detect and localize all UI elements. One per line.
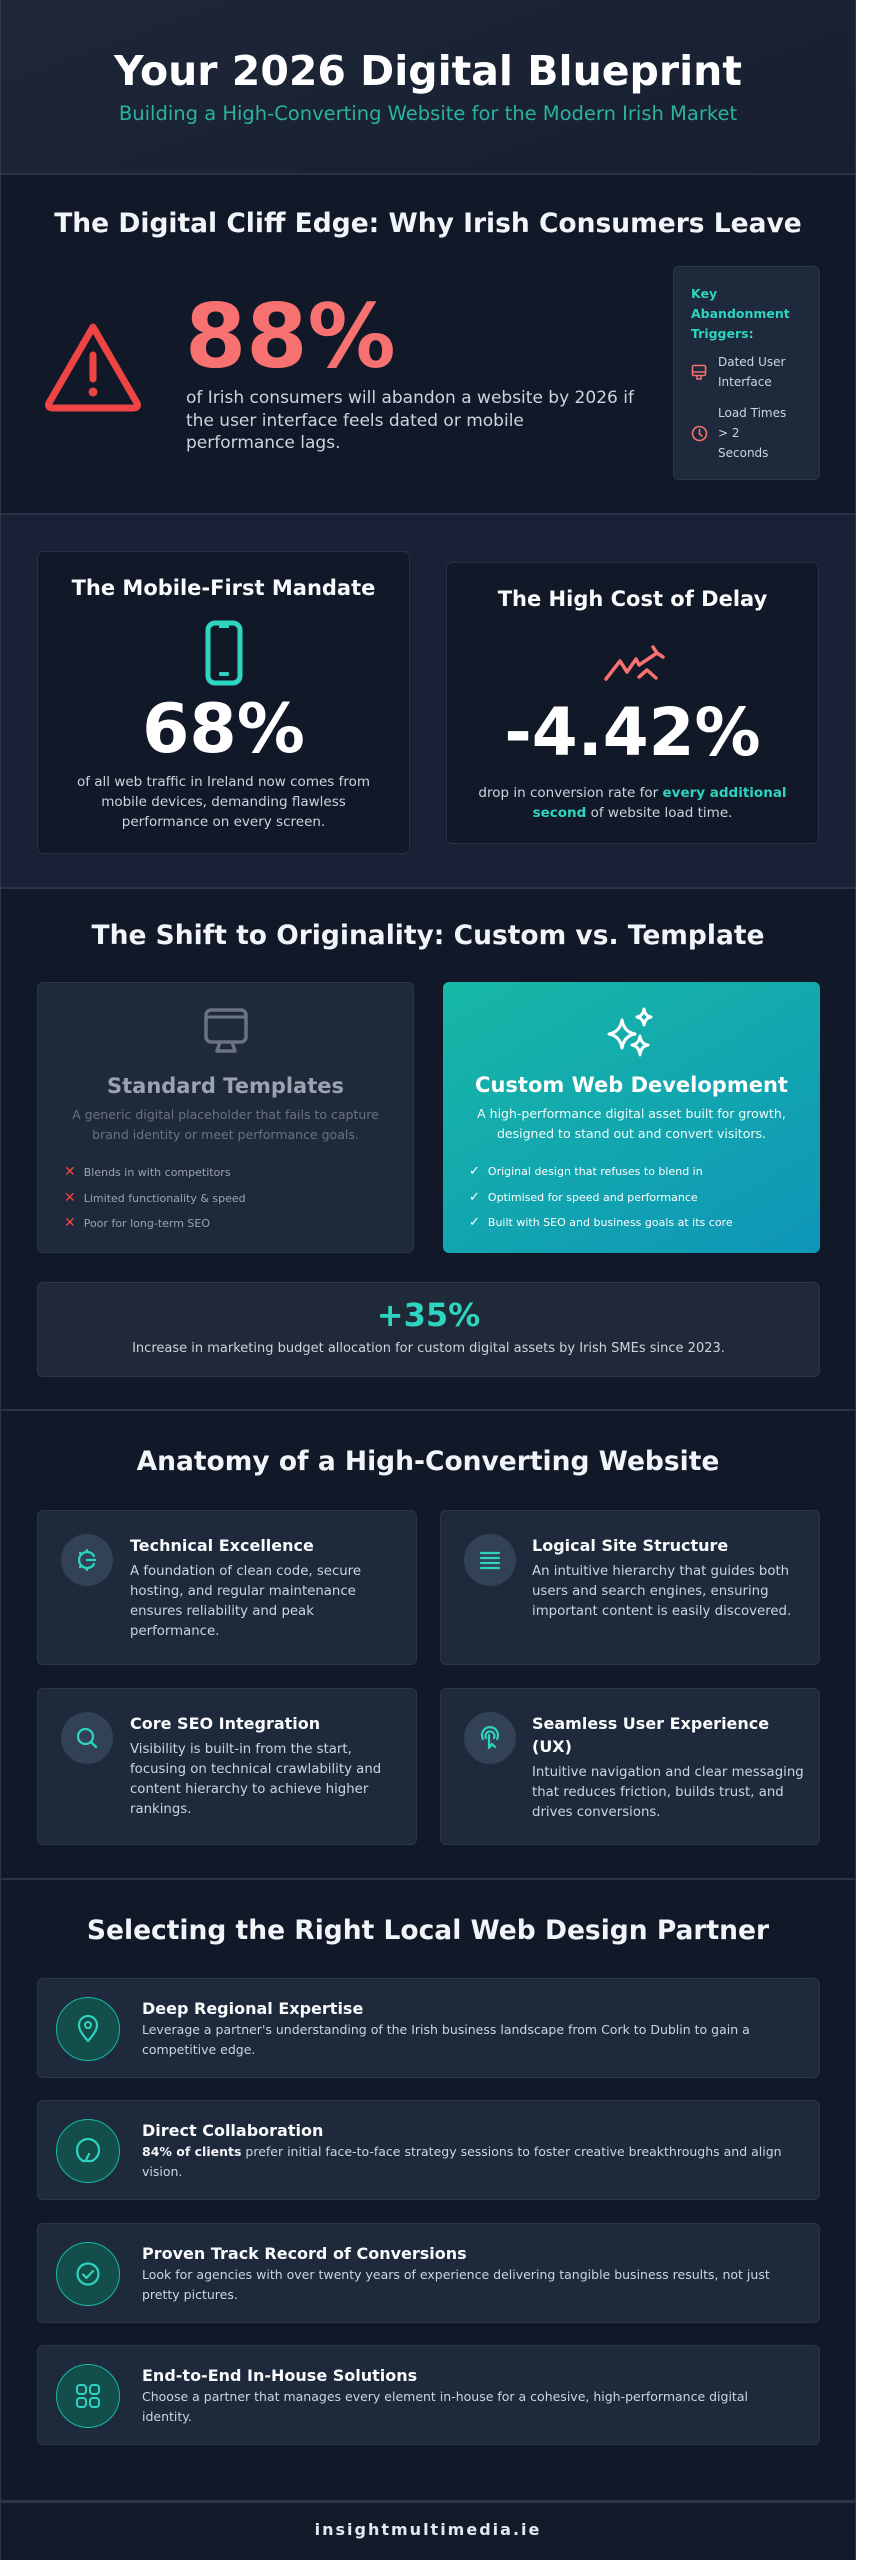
text: Leverage a partner's understanding of the Irish business landscape from Cork to Dublin to gain a competitive edge. [142, 2022, 750, 2057]
title: Deep Regional Expertise [142, 1999, 363, 2018]
panel: digital cliff edge [1, 173, 855, 513]
description: A high-performance digital asset built for growth, designed to stand out and convert visitors. [477, 1106, 786, 1141]
text: Look for agencies with over twenty years of experience delivering tangible business results, not just pretty pictures. [142, 2267, 770, 2302]
card: track record [37, 2223, 820, 2323]
title: Core SEO Integration [130, 1714, 320, 1733]
list: benefits: ✓ Original design that refuses to blend in [469, 1164, 703, 1179]
trigger: dated UI: Interface [718, 375, 772, 389]
heading: The Digital Cliff Edge: Why Irish Consumers Leave [54, 208, 802, 239]
description: the user interface feels dated or mobile [186, 410, 524, 430]
list: benefits: ✓ Built with SEO and business goals at its core [469, 1215, 733, 1230]
triggers heading: Key [691, 286, 717, 301]
triggers heading: Triggers: [691, 326, 754, 341]
stat 68%: 68% [142, 690, 305, 769]
title: Seamless User Experience (UX) [532, 1714, 769, 1756]
title: Technical Excellence [130, 1536, 314, 1555]
title: End-to-End In-House Solutions [142, 2366, 417, 2385]
text: A foundation of clean code, secure hosting, and regular maintenance ensures reliability and peak performance. [130, 1564, 361, 1639]
heading: The Shift to Originality: Custom vs. Template [92, 920, 764, 951]
icon: chat [56, 2119, 120, 2183]
trigger: load times: > 2 [718, 426, 740, 440]
card: custom web development [443, 982, 820, 1253]
text: 84% of clients prefer initial face-to-face strategy sessions to foster creative breakthroughs and align vision. [142, 2144, 782, 2179]
icon: pointer [464, 1712, 516, 1764]
list: drawbacks: ✕ Limited functionality & speed [64, 1190, 246, 1206]
card: core SEO [37, 1688, 417, 1845]
icon: search [61, 1712, 113, 1764]
title: Logical Site Structure [532, 1536, 728, 1555]
footer [1, 2500, 855, 2560]
panel: mobile and delay stats [1, 513, 855, 887]
trigger: dated UI [692, 355, 786, 389]
trigger: load times: Load Times [718, 406, 786, 420]
text: Visibility is built-in from the start, focusing on technical crawlability and content hierarchy to achieve higher rankings. [130, 1742, 381, 1817]
card: seamless UX [440, 1688, 820, 1845]
title: Direct Collaboration [142, 2121, 323, 2140]
stat -4.42%: -4.42% [504, 694, 761, 771]
icon: check circle [56, 2242, 120, 2306]
triggers heading: Abandonment [691, 306, 790, 321]
subtitle: Building a High-Converting Website for the Modern Irish Market [119, 102, 737, 125]
key triggers box [673, 266, 820, 480]
header [1, 0, 855, 174]
card: technical excellence [37, 1510, 417, 1665]
heading: Selecting the Right Local Web Design Partner [87, 1915, 769, 1946]
card: direct collaboration [37, 2100, 820, 2200]
list: drawbacks [64, 1164, 246, 1231]
description: of Irish consumers will abandon a website by 2026 if [186, 388, 634, 408]
icon: gear [61, 1534, 113, 1586]
description: drop in conversion rate for every additional second of website load time. [478, 785, 787, 821]
footer text: insightmultimedia.ie [315, 2520, 541, 2539]
caption: Increase in marketing budget allocation for custom digital assets by Irish SMEs since 2023. [132, 1341, 725, 1356]
callout: +35% [37, 1282, 820, 1377]
card: logical site structure [440, 1510, 820, 1665]
icon: monitor [204, 1008, 248, 1053]
panel: anatomy [1, 1409, 855, 1878]
icon: warning [45, 324, 141, 412]
panel: custom vs template [1, 887, 855, 1409]
text: An intuitive hierarchy that guides both users and search engines, ensuring important content is easily discovered. [532, 1564, 791, 1619]
list: benefits [469, 1164, 733, 1230]
card: mobile-first [37, 551, 410, 854]
text: Choose a partner that manages every element in-house for a cohesive, high-performance digital identity. [142, 2389, 748, 2424]
triggers heading [691, 286, 790, 341]
card title: The Mobile-First Mandate [72, 576, 375, 600]
icon: falling trend [604, 645, 665, 681]
list: drawbacks: ✕ Poor for long-term SEO [64, 1215, 210, 1231]
stat +35%: +35% [377, 1296, 480, 1334]
description: A generic digital placeholder that fails to capture brand identity or meet performance goals. [72, 1107, 379, 1142]
trigger: load times: Seconds [718, 446, 768, 460]
icon: phone [206, 620, 242, 686]
title: Your 2026 Digital Blueprint [114, 47, 742, 95]
list: drawbacks: ✕ Blends in with competitors [64, 1164, 231, 1180]
trigger: load times [692, 406, 786, 460]
list: benefits: ✓ Optimised for speed and performance [469, 1190, 698, 1204]
description [186, 388, 634, 453]
card: standard templates [37, 982, 414, 1253]
panel: selecting partner [1, 1878, 855, 2500]
description: performance lags. [186, 433, 340, 453]
trigger: dated UI: Dated User [718, 355, 785, 369]
text: Intuitive navigation and clear messaging that reduces friction, builds trust, and drives conversions. [532, 1765, 804, 1820]
stat 88%: 88% [185, 285, 396, 388]
card title: Standard Templates [107, 1074, 344, 1098]
icon: sparkles [608, 1008, 652, 1056]
card: high cost of delay [446, 562, 819, 844]
card: regional expertise [37, 1978, 820, 2078]
heading: Anatomy of a High-Converting Website [137, 1446, 719, 1477]
title: Proven Track Record of Conversions [142, 2244, 467, 2263]
icon: map pin [56, 1997, 120, 2061]
card: in-house solutions [37, 2345, 820, 2445]
icon: list [464, 1534, 516, 1586]
card title: The High Cost of Delay [498, 587, 767, 611]
description: of all web traffic in Ireland now comes from mobile devices, demanding flawless performance on every screen. [77, 774, 370, 830]
icon: grid [56, 2364, 120, 2428]
card title: Custom Web Development [475, 1073, 788, 1097]
